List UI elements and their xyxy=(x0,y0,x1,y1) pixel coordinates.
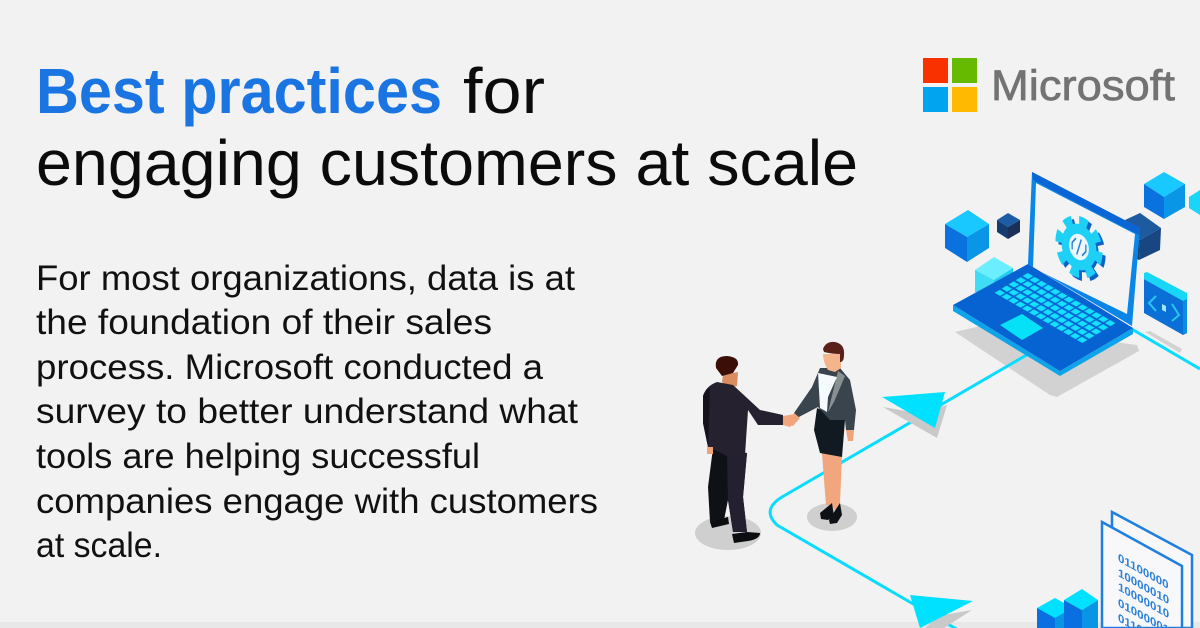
Microsoft logo: Microsoft xyxy=(991,62,1175,110)
Microsoft logo xyxy=(923,58,1175,112)
intro text block xyxy=(36,259,598,565)
binary text: 10000010 xyxy=(1118,580,1169,621)
laptop illustration xyxy=(953,172,1140,376)
data documents illustration xyxy=(1102,512,1192,628)
back sheet xyxy=(1112,512,1192,628)
cube: blue upper right xyxy=(1144,172,1185,219)
bar blocks xyxy=(1037,589,1098,628)
intro text block: survey to better understand what xyxy=(36,392,578,431)
person: businessman xyxy=(695,356,795,550)
trackpad xyxy=(1000,314,1043,340)
laptop base xyxy=(953,305,1133,376)
connector line: laptop to right edge xyxy=(1130,328,1200,369)
binary text: 10000010 xyxy=(1118,566,1169,607)
binary text xyxy=(1118,551,1169,628)
cube: blue left xyxy=(945,210,989,262)
intro text block: the foundation of their sales xyxy=(36,303,492,342)
arrow marker upper xyxy=(882,392,947,438)
binary text: 01100000 xyxy=(1118,551,1169,592)
intro text block: For most organizations, data is at xyxy=(36,259,575,298)
title xyxy=(36,55,858,199)
intro text block: tools are helping successful xyxy=(36,437,480,476)
laptop screen xyxy=(1028,172,1140,326)
person: businesswoman xyxy=(788,342,857,531)
laptop shadow xyxy=(955,325,1139,397)
front sheet xyxy=(1102,522,1182,628)
gear icon xyxy=(1059,216,1102,281)
cube: dark behind screen xyxy=(1125,213,1161,260)
keyboard xyxy=(993,272,1117,344)
title line two: engaging customers at scale xyxy=(36,127,858,199)
intro text block: at scale. xyxy=(36,526,162,565)
intro text block: companies engage with customers xyxy=(36,482,598,521)
intro text block: process. Microsoft conducted a xyxy=(36,348,544,387)
arrow marker lower xyxy=(910,595,973,628)
connector line: laptop to people to data xyxy=(770,353,1030,628)
code window card xyxy=(1144,272,1187,353)
cube: light behind laptop xyxy=(975,257,1013,300)
cube: far right edge xyxy=(1189,190,1200,215)
title highlight: Best practices: Best practices xyxy=(36,55,442,127)
cube: small dark xyxy=(997,213,1020,239)
title word: for: for xyxy=(463,55,545,127)
